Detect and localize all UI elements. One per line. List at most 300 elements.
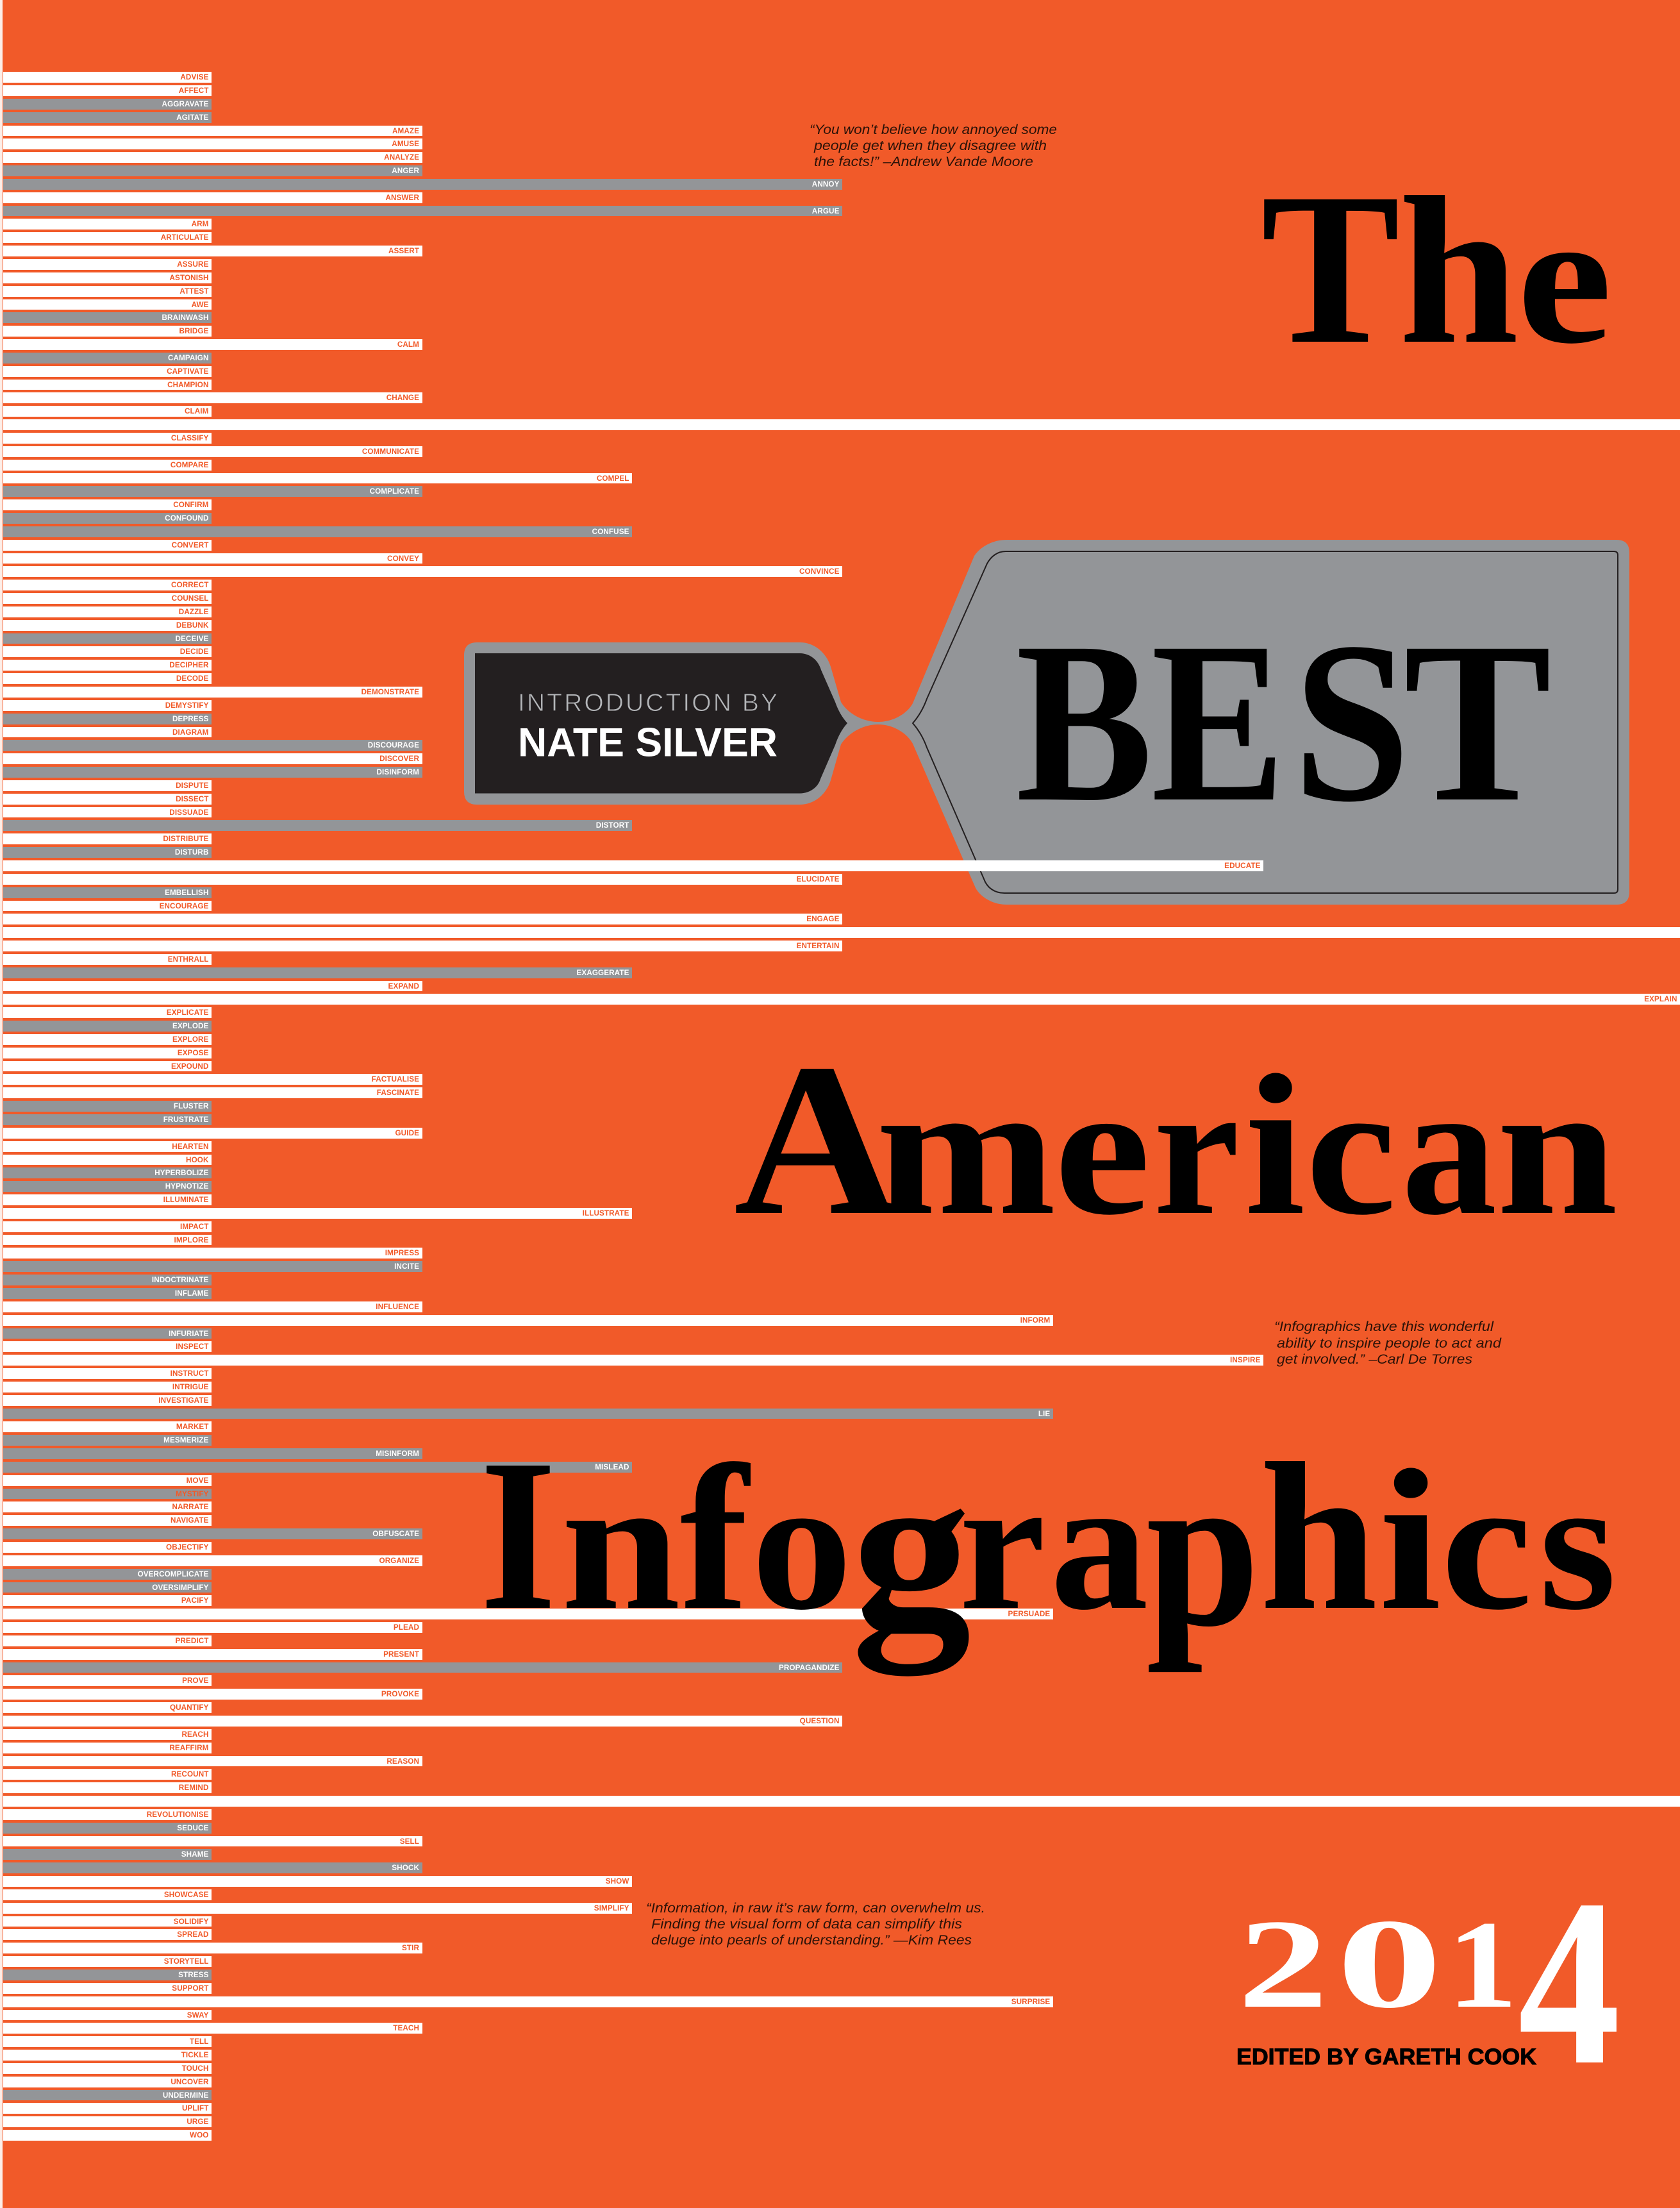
bar: expound: EXPOUND xyxy=(171,1062,209,1071)
bar: solidify: SOLIDIFY xyxy=(174,1918,209,1926)
bar: hearten: HEARTEN xyxy=(172,1142,209,1151)
bar: amuse xyxy=(3,138,422,149)
bar: elucidate xyxy=(3,874,842,885)
bar: aggravate: AGGRAVATE xyxy=(162,100,209,108)
bar: discover: DISCOVER xyxy=(379,755,419,763)
bar: answer xyxy=(3,192,422,203)
bar: expand: EXPAND xyxy=(388,982,419,991)
bar: articulate: ARTICULATE xyxy=(161,233,209,242)
title word: Infographics: h xyxy=(1260,1419,1377,1655)
bar: complicate: COMPLICATE xyxy=(370,487,419,496)
title word: Infographics: g xyxy=(852,1423,971,1678)
bar: debunk: DEBUNK xyxy=(176,621,209,630)
title word: BEST: B xyxy=(1016,594,1152,850)
bar: disturb xyxy=(3,847,212,858)
year: 2014: 1 xyxy=(1447,1895,1518,2034)
bar: question: QUESTION xyxy=(800,1717,840,1725)
bar: dissect xyxy=(3,794,212,805)
bar: explicate xyxy=(3,1007,212,1018)
bar: explicate: EXPLICATE xyxy=(167,1008,209,1017)
text: nate silver: NATE SILVER xyxy=(518,721,778,765)
bar: intrigue: INTRIGUE xyxy=(172,1383,209,1391)
bar: factualise: FACTUALISE xyxy=(372,1075,419,1083)
bar: confound: CONFOUND xyxy=(165,514,209,523)
bar: dazzle xyxy=(3,606,212,617)
quote: Andrew Vande Moore: people get when they disagree with xyxy=(813,138,1047,153)
bar: spread xyxy=(3,1929,212,1940)
bar: explore xyxy=(3,1034,212,1045)
bar: remind xyxy=(3,1782,212,1793)
year: 2014: 2 xyxy=(1238,1893,1328,2035)
title word: The: h xyxy=(1399,153,1519,389)
bar: illuminate xyxy=(3,1194,212,1205)
bar: complicate xyxy=(3,486,422,497)
bar: pacify xyxy=(3,1595,212,1606)
title word: American: r xyxy=(1153,1044,1240,1255)
editor credit: EDITED BY GARETH COOK xyxy=(1236,2045,1536,2070)
text: introduction by: INTRODUCTION BY xyxy=(518,689,778,717)
bar: tell: TELL xyxy=(190,2037,209,2046)
bar: discourage: DISCOURAGE xyxy=(368,741,419,749)
bar: astonish: ASTONISH xyxy=(170,274,209,282)
bar: fascinate: FASCINATE xyxy=(377,1089,419,1097)
bar: hearten xyxy=(3,1141,212,1152)
bar: expand xyxy=(3,981,422,991)
bar: sway xyxy=(3,2010,212,2020)
bar: amaze xyxy=(3,126,422,136)
bar: attest: ATTEST xyxy=(179,287,209,296)
bar: misinform: MISINFORM xyxy=(376,1450,419,1458)
bar: shame: SHAME xyxy=(181,1850,209,1859)
bar: sell: SELL xyxy=(400,1837,419,1846)
bar: hyperbolize: HYPERBOLIZE xyxy=(154,1169,209,1177)
bar: embellish xyxy=(3,887,212,898)
bar: decode: DECODE xyxy=(176,674,209,683)
quote: Andrew Vande Moore: “You won’t believe how annoyed some xyxy=(810,122,1057,137)
bar: distribute: DISTRIBUTE xyxy=(163,835,209,843)
bar: investigate: INVESTIGATE xyxy=(158,1396,209,1405)
bar: support xyxy=(3,1983,212,1994)
bar: calm: CALM xyxy=(397,340,419,349)
bar: expose: EXPOSE xyxy=(178,1049,209,1057)
bar: mislead xyxy=(3,1462,632,1473)
bar: advise xyxy=(3,72,212,83)
bar: discover xyxy=(3,753,422,764)
bar: decipher: DECIPHER xyxy=(169,661,209,669)
bar: dispute xyxy=(3,780,212,791)
bar: stress xyxy=(3,1970,212,1980)
bar: compel xyxy=(3,473,632,483)
bar: showcase xyxy=(3,1889,212,1900)
bar: compel: COMPEL xyxy=(597,474,629,482)
title word: Infographics: p xyxy=(1146,1425,1260,1674)
quote: Kim Rees: “Information, in raw it’s raw form, can overwhelm us. xyxy=(646,1900,985,1916)
bar: enthrall xyxy=(3,954,212,965)
bar: awe: AWE xyxy=(192,301,209,309)
bar: revolutionise: REVOLUTIONISE xyxy=(147,1811,209,1819)
bar: demystify: DEMYSTIFY xyxy=(165,701,209,710)
bar: hypnotize: HYPNOTIZE xyxy=(165,1182,209,1191)
title word: Infographics: n xyxy=(561,1439,681,1650)
bar: explain xyxy=(3,994,1680,1005)
bar: obfuscate: OBFUSCATE xyxy=(372,1530,419,1538)
quote: Andrew Vande Moore: the facts!” –Andrew Vande Moore xyxy=(814,154,1033,169)
bar: seduce: SEDUCE xyxy=(177,1824,209,1832)
bar: convert xyxy=(3,540,212,551)
bar: campaign: CAMPAIGN xyxy=(168,354,209,362)
bar: compare: COMPARE xyxy=(170,461,209,469)
title word: The: e xyxy=(1517,173,1612,383)
bar: illuminate: ILLUMINATE xyxy=(163,1196,209,1204)
bar: objectify: OBJECTIFY xyxy=(166,1543,209,1551)
bar: communicate xyxy=(3,446,422,457)
bar: explode: EXPLODE xyxy=(172,1022,209,1030)
quote: Kim Rees: deluge into pearls of understanding.” —Kim Rees xyxy=(651,1932,972,1948)
bar: teach xyxy=(3,2023,422,2034)
bar: sell xyxy=(3,1836,422,1846)
bar: seduce xyxy=(3,1823,212,1834)
bar: encourage: ENCOURAGE xyxy=(160,901,209,910)
bar: shock xyxy=(3,1862,422,1873)
bar: prove: PROVE xyxy=(182,1677,209,1685)
bar: correct: CORRECT xyxy=(171,581,209,589)
bar: infuriate: INFURIATE xyxy=(169,1330,209,1337)
bar: distort xyxy=(3,820,632,831)
bar: teach: TEACH xyxy=(393,2024,419,2032)
bar: analyze: ANALYZE xyxy=(384,153,419,162)
bar: impress: IMPRESS xyxy=(385,1249,419,1257)
bar: distort: DISTORT xyxy=(596,821,629,830)
bar: impact: IMPACT xyxy=(180,1223,209,1231)
bar: confound xyxy=(3,513,212,524)
bar: annoy xyxy=(3,179,842,190)
bar: convert: CONVERT xyxy=(172,541,209,549)
bar: dissuade xyxy=(3,807,212,817)
bar: tickle xyxy=(3,2050,212,2061)
bar: provoke xyxy=(3,1689,422,1700)
bar: assert: ASSERT xyxy=(388,247,419,255)
bar: frustrate: FRUSTRATE xyxy=(163,1116,209,1124)
bar: convince xyxy=(3,566,842,577)
bar: decide xyxy=(3,646,212,657)
bar: inform: INFORM xyxy=(1020,1316,1050,1325)
bar: entertain xyxy=(3,941,842,951)
bar: mesmerize: MESMERIZE xyxy=(163,1436,209,1444)
bar: classify xyxy=(3,433,212,444)
bar: recount xyxy=(3,1769,212,1780)
bar: depress xyxy=(3,714,212,724)
bar: demonstrate xyxy=(3,687,422,698)
bar: urge xyxy=(3,2116,212,2127)
bar: organize xyxy=(3,1555,422,1566)
bar: arm: ARM xyxy=(192,220,209,228)
bar: discourage xyxy=(3,740,422,751)
quote: Andrew Vande Moore xyxy=(810,122,1057,169)
bar: reaffirm xyxy=(3,1743,212,1753)
bar: undermine xyxy=(3,2090,212,2100)
bar: confirm xyxy=(3,499,212,510)
bar: support: SUPPORT xyxy=(172,1984,209,1993)
bar: campaign xyxy=(3,353,212,364)
bar: inspect xyxy=(3,1341,212,1352)
bar: assure: ASSURE xyxy=(177,260,209,269)
bar: factualise xyxy=(3,1074,422,1085)
bar: dissuade: DISSUADE xyxy=(169,808,209,817)
bar: distribute xyxy=(3,833,212,844)
bar: predict: PREDICT xyxy=(176,1637,209,1645)
bar: simplify: SIMPLIFY xyxy=(594,1904,629,1912)
year: 2014: 4 xyxy=(1518,1850,1620,2115)
bar: guide: GUIDE xyxy=(395,1129,419,1137)
title word: Infographics: r xyxy=(959,1439,1045,1650)
bar: disinform xyxy=(3,767,422,778)
bar: inspire: INSPIRE xyxy=(1230,1356,1260,1364)
bar: demonstrate: DEMONSTRATE xyxy=(362,688,419,696)
bar: educate xyxy=(3,860,1263,871)
gray double tag shape xyxy=(464,540,1629,905)
bar: affect: AFFECT xyxy=(179,87,209,95)
title word: BEST: E xyxy=(1151,594,1285,850)
bar: plead: PLEAD xyxy=(394,1623,419,1632)
bar: diagram: DIAGRAM xyxy=(172,728,209,737)
bar: anger xyxy=(3,165,422,176)
bar: assert xyxy=(3,246,422,256)
bar: quantify xyxy=(3,1702,212,1713)
bar: fascinate xyxy=(3,1087,422,1098)
bar: affect xyxy=(3,85,212,96)
bar: deceive xyxy=(3,633,212,644)
bar: change xyxy=(3,392,422,403)
bar: counsel: COUNSEL xyxy=(172,594,209,603)
bar: simplify xyxy=(3,1903,632,1914)
bar: shock: SHOCK xyxy=(392,1864,419,1872)
bar: implore xyxy=(3,1235,212,1245)
bar: engage: ENGAGE xyxy=(806,915,840,923)
bar: agitate xyxy=(3,112,212,123)
bar: communicate: COMMUNICATE xyxy=(362,447,419,456)
bar: investigate xyxy=(3,1395,212,1406)
bar: market: MARKET xyxy=(176,1423,209,1431)
bar: lie xyxy=(3,1409,1053,1419)
bar: awe xyxy=(3,299,212,310)
bar: explore: EXPLORE xyxy=(172,1035,209,1044)
bar: uplift xyxy=(3,2103,212,2114)
bar: captivate: CAPTIVATE xyxy=(167,367,209,376)
quote: Carl De Torres: get involved.” –Carl De Torres xyxy=(1277,1351,1472,1367)
bar: advise: ADVISE xyxy=(180,73,209,81)
bar: plead xyxy=(3,1622,422,1633)
bar: present xyxy=(3,1649,422,1660)
bar: infuriate xyxy=(3,1328,212,1339)
bar: disinform: DISINFORM xyxy=(377,768,419,776)
bar: storytell: STORYTELL xyxy=(164,1957,209,1966)
bar: confirm: CONFIRM xyxy=(173,501,209,509)
bar: assure xyxy=(3,259,212,270)
bar: influence: INFLUENCE xyxy=(376,1303,419,1311)
title word: Infographics xyxy=(480,1414,1617,1678)
year: 2014 xyxy=(1238,1850,1620,2115)
bar: stir xyxy=(3,1943,422,1953)
bar: organize: ORGANIZE xyxy=(379,1557,419,1565)
bar: educate: EDUCATE xyxy=(1224,862,1260,870)
bar: argue: ARGUE xyxy=(812,207,840,215)
bar: uncover xyxy=(3,2077,212,2087)
bar: inspire xyxy=(3,1355,1263,1366)
bar: objectify xyxy=(3,1542,212,1553)
bar: surprise xyxy=(3,1996,1053,2007)
bar: diagram xyxy=(3,727,212,737)
title word: Infographics: I xyxy=(480,1414,556,1656)
bar: decipher xyxy=(3,660,212,671)
bar: expose xyxy=(3,1048,212,1058)
bar: influence xyxy=(3,1301,422,1312)
bar: fluster xyxy=(3,1101,212,1112)
bar: reason xyxy=(3,1755,422,1766)
bar: surprise: SURPRISE xyxy=(1011,1998,1050,2006)
bar: oversimplify: OVERSIMPLIFY xyxy=(152,1584,209,1592)
bar: expound xyxy=(3,1061,212,1071)
bar: confuse xyxy=(3,526,632,537)
title word: Infographics: f xyxy=(680,1423,752,1654)
bar: quantify: QUANTIFY xyxy=(170,1703,209,1712)
bar: lie: LIE xyxy=(1038,1410,1050,1418)
bar: uncover: UNCOVER xyxy=(170,2078,209,2086)
bar: agitate: AGITATE xyxy=(176,113,209,122)
bar: narrate: NARRATE xyxy=(172,1503,209,1511)
bar: classify: CLASSIFY xyxy=(171,434,209,442)
bar: mystify xyxy=(3,1489,212,1499)
dark introduction panel xyxy=(475,653,847,794)
bar: guide xyxy=(3,1128,422,1139)
bar: inform xyxy=(3,1315,1053,1326)
bar: illustrate xyxy=(3,1208,632,1219)
bar: show xyxy=(3,1876,632,1887)
bar: impress xyxy=(3,1248,422,1259)
bar: claim: CLAIM xyxy=(185,407,209,415)
inner outline of BEST tag xyxy=(913,551,1618,893)
bar: revolutionise xyxy=(3,1809,212,1820)
title word: BEST: T xyxy=(1404,594,1552,850)
bar: question xyxy=(3,1716,842,1727)
bar: incite xyxy=(3,1261,422,1272)
bar: deceive: DECEIVE xyxy=(175,635,209,643)
bar: persuade: PERSUADE xyxy=(1008,1610,1050,1618)
bar: reason: REASON xyxy=(387,1757,419,1766)
bar: demystify xyxy=(3,700,212,711)
bar: astonish xyxy=(3,272,212,283)
bar: articulate xyxy=(3,232,212,243)
bar: inspect: INSPECT xyxy=(176,1342,209,1351)
bar: remind: REMIND xyxy=(179,1784,209,1792)
title word: American xyxy=(734,1019,1618,1261)
bar: illustrate: ILLUSTRATE xyxy=(583,1209,629,1217)
bar: embellish: EMBELLISH xyxy=(165,889,209,897)
bar: inflame: INFLAME xyxy=(175,1289,209,1298)
bar: answer: ANSWER xyxy=(385,194,419,202)
bar: explode xyxy=(3,1021,212,1032)
bar: pacify: PACIFY xyxy=(181,1596,209,1605)
bar: spread: SPREAD xyxy=(177,1930,209,1939)
quote: Carl De Torres: ability to inspire people to act and xyxy=(1277,1335,1502,1351)
bar: recount: RECOUNT xyxy=(171,1770,209,1778)
bar: convince: CONVINCE xyxy=(799,567,840,576)
bar: dissect: DISSECT xyxy=(176,795,209,803)
bar: stir: STIR xyxy=(402,1944,419,1952)
bar: elucidate: ELUCIDATE xyxy=(797,875,840,883)
title word: BEST: S xyxy=(1293,594,1410,850)
bar: confuse: CONFUSE xyxy=(592,528,629,536)
title word: The: T xyxy=(1261,148,1400,390)
bar: brainwash xyxy=(3,312,212,323)
bar: exaggerate xyxy=(3,967,632,978)
bar: tell xyxy=(3,2036,212,2047)
bar: mesmerize xyxy=(3,1435,212,1446)
bar: indoctrinate: INDOCTRINATE xyxy=(152,1276,209,1284)
bar: undermine: UNDERMINE xyxy=(163,2091,209,2100)
bar: bridge xyxy=(3,326,212,337)
quote: Carl De Torres xyxy=(1274,1319,1502,1367)
quote: Kim Rees xyxy=(646,1900,985,1948)
bar: correct xyxy=(3,580,212,590)
bar: decode xyxy=(3,673,212,684)
title word: BEST xyxy=(1016,594,1552,850)
bar: attest xyxy=(3,286,212,297)
bar: hypnotize xyxy=(3,1181,212,1192)
bar: propagandize: PROPAGANDIZE xyxy=(779,1664,840,1672)
bar: propagandize xyxy=(3,1662,842,1673)
bar: decide: DECIDE xyxy=(180,648,209,656)
bar: stress: STRESS xyxy=(178,1971,209,1979)
bar: full width, label off page xyxy=(3,419,1680,430)
bar: champion: CHAMPION xyxy=(167,381,209,389)
bar: narrate xyxy=(3,1501,212,1512)
bar: bridge: BRIDGE xyxy=(179,327,209,335)
title word: American: m xyxy=(876,1044,1056,1255)
bar: storytell xyxy=(3,1956,212,1967)
title word: Infographics: o xyxy=(751,1439,852,1650)
bar: dazzle: DAZZLE xyxy=(179,608,209,616)
title word: American: A xyxy=(734,1019,900,1261)
title word: American: c xyxy=(1306,1044,1396,1255)
bar: inflame xyxy=(3,1288,212,1299)
bar: convey xyxy=(3,553,422,564)
bar: woo: WOO xyxy=(190,2131,209,2139)
bar: incite: INCITE xyxy=(394,1262,419,1271)
bar: predict xyxy=(3,1635,212,1646)
title word: The xyxy=(1261,148,1612,390)
bar: implore: IMPLORE xyxy=(174,1236,209,1244)
bar: show: SHOW xyxy=(606,1877,629,1886)
bar: woo xyxy=(3,2130,212,2141)
bar: impact xyxy=(3,1221,212,1232)
bar: touch xyxy=(3,2063,212,2074)
title word: American: e xyxy=(1054,1044,1151,1255)
bar: touch: TOUCH xyxy=(182,2064,209,2073)
bar: change: CHANGE xyxy=(387,394,419,402)
bar: full width, label off page xyxy=(3,1796,1680,1807)
bar: argue xyxy=(3,206,842,216)
bar: overcomplicate: OVERCOMPLICATE xyxy=(138,1570,209,1578)
bar: fluster: FLUSTER xyxy=(174,1102,209,1110)
bar: compare xyxy=(3,460,212,471)
title word: Infographics: c xyxy=(1441,1439,1532,1650)
bar: engage xyxy=(3,914,842,924)
bar: counsel xyxy=(3,593,212,604)
bar: analyze xyxy=(3,152,422,163)
bar: dispute: DISPUTE xyxy=(176,782,209,790)
bar: market xyxy=(3,1421,212,1432)
bar: reach: REACH xyxy=(181,1730,209,1739)
